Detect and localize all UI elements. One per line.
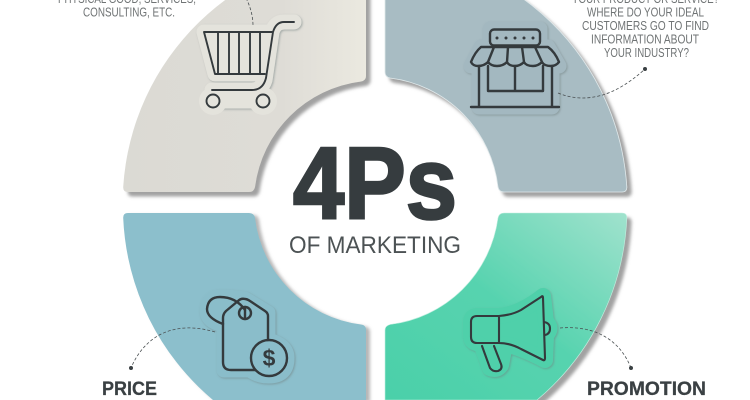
panel: place xyxy=(385,0,627,192)
icon: storefront xyxy=(471,29,559,107)
panel: promotion xyxy=(385,213,627,400)
icon: price tag: $ xyxy=(263,345,276,371)
connector: place xyxy=(558,67,647,98)
heading: price: PRICE xyxy=(102,378,157,400)
icon: shopping cart xyxy=(199,22,294,115)
subtitle: of marketing: OF MARKETING xyxy=(289,232,461,259)
connector: promotion xyxy=(560,328,633,370)
text block: product description xyxy=(58,0,196,20)
text block: place description: INFORMATION ABOUT xyxy=(591,32,699,46)
title: 4Ps: 4Ps xyxy=(293,126,457,240)
text block: place description: YOUR INDUSTRY? xyxy=(604,46,689,60)
panel: price xyxy=(123,213,366,400)
icon: price tag xyxy=(207,297,287,376)
text block: place description: WHERE DO YOUR IDEAL xyxy=(587,6,704,20)
icon: megaphone xyxy=(471,296,550,371)
text block: product description: CONSULTING, ETC. xyxy=(83,6,175,20)
text block: place description xyxy=(572,0,719,60)
connector: price xyxy=(129,328,215,370)
panel: product xyxy=(123,0,366,192)
heading: promotion: PROMOTION xyxy=(587,378,706,400)
text block: place description: CUSTOMERS GO TO FIND xyxy=(582,19,709,33)
connector: product xyxy=(246,0,253,26)
